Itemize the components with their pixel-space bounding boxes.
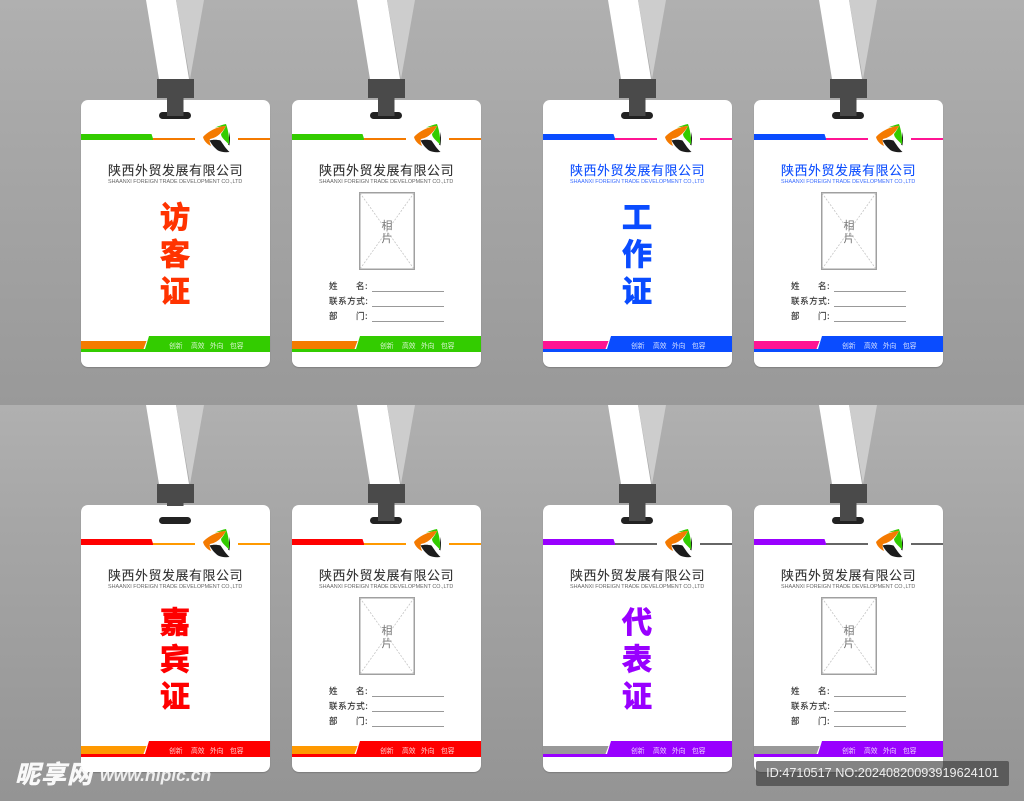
company name: 陕西外贸发展有限公司	[319, 160, 454, 179]
form fields	[791, 280, 906, 322]
pass type heading: 客	[160, 230, 190, 274]
form fields	[329, 280, 444, 322]
icon: company logo	[876, 124, 903, 152]
form fields: 姓	[791, 280, 800, 292]
lanyard and clip	[608, 0, 666, 119]
lanyard and clip	[543, 405, 732, 530]
form fields	[791, 684, 907, 730]
pass type heading: 代	[622, 598, 652, 642]
pass type heading: 嘉	[160, 598, 190, 642]
slogan: 高效	[653, 340, 667, 350]
pass type heading	[160, 193, 190, 311]
form fields: 联系方式:	[791, 700, 830, 712]
company name in English: SHAANXI FOREIGN TRADE DEVELOPMENT CO.,LTD	[570, 179, 704, 185]
form fields: 门:	[818, 310, 830, 322]
image ID box: ID:4710517 NO:20240820093919624101	[766, 766, 999, 780]
slogan: 高效	[402, 340, 416, 350]
slogan: 高效	[864, 340, 878, 350]
badge: delegate pass front (purple)	[543, 405, 732, 773]
lanyard and clip	[819, 0, 877, 119]
background: top row	[0, 0, 1024, 405]
top and bottom colour bands	[543, 505, 732, 772]
form fields: 姓	[329, 685, 338, 697]
slogan: 创新	[842, 340, 856, 350]
slogan: 包容	[441, 340, 455, 350]
slogan: 高效	[402, 745, 416, 755]
watermark: site name: 昵享网	[15, 755, 93, 791]
slogan: 外向	[672, 745, 686, 755]
slogan: 包容	[230, 340, 244, 350]
slogan: 包容	[903, 340, 917, 350]
slogan: 高效	[864, 745, 878, 755]
slogan	[380, 340, 455, 350]
company name in English: SHAANXI FOREIGN TRADE DEVELOPMENT CO.,LTD	[108, 179, 242, 185]
pass type heading: 证	[160, 267, 190, 311]
slogan: 创新	[631, 745, 645, 755]
badge: guest pass back (red)	[292, 405, 481, 773]
top and bottom colour bands	[81, 539, 270, 757]
badge: staff pass back (blue)	[754, 0, 943, 368]
photo placeholder: 相	[382, 217, 392, 233]
company name: 陕西外贸发展有限公司	[570, 160, 705, 179]
icon: company logo	[665, 124, 692, 152]
slogan: 外向	[210, 340, 224, 350]
slogan: 包容	[692, 340, 706, 350]
slogan: 外向	[210, 745, 224, 755]
slogan	[543, 745, 732, 755]
slogan: 外向	[883, 340, 897, 350]
slogan: 包容	[230, 745, 244, 755]
company name: 陕西外贸发展有限公司	[108, 160, 243, 179]
pass type heading	[607, 602, 667, 714]
card body	[81, 505, 270, 772]
lanyard and clip	[357, 0, 415, 119]
form fields: 门:	[818, 715, 830, 727]
form fields: 门:	[356, 310, 368, 322]
slogan: 包容	[441, 745, 455, 755]
card body	[292, 505, 481, 772]
photo placeholder: 片	[382, 635, 392, 651]
icon: company logo	[414, 124, 441, 152]
form fields: 姓	[329, 280, 338, 292]
image ID box	[756, 761, 1009, 786]
background: bottom row	[0, 405, 1024, 801]
company name in English: SHAANXI FOREIGN TRADE DEVELOPMENT CO.,LTD	[570, 584, 704, 590]
photo placeholder: 相	[382, 622, 392, 638]
icon: company logo	[414, 529, 441, 558]
slogan	[631, 340, 706, 350]
pass type heading: 宾	[160, 635, 190, 679]
company name in English: SHAANXI FOREIGN TRADE DEVELOPMENT CO.,LTD	[781, 584, 915, 590]
photo placeholder: 片	[844, 230, 854, 246]
icon: company logo	[665, 529, 692, 558]
badge: visitor pass back (green)	[292, 0, 481, 368]
pass type heading: 证	[160, 672, 190, 716]
pass type heading: 证	[622, 672, 652, 716]
slogan: 高效	[191, 340, 205, 350]
slogan: 包容	[903, 745, 917, 755]
slogan: 外向	[883, 745, 897, 755]
lanyard and clip	[146, 405, 204, 524]
form fields: 部	[791, 715, 800, 727]
top and bottom colour bands	[754, 505, 943, 772]
form fields: 门:	[356, 715, 368, 727]
photo placeholder	[359, 597, 415, 675]
slogan: 包容	[692, 745, 706, 755]
card body	[754, 100, 943, 367]
top and bottom colour bands	[292, 134, 481, 352]
badge: staff pass front (blue)	[543, 0, 732, 368]
slogan: 外向	[421, 340, 435, 350]
card body	[754, 505, 943, 772]
company name in English: SHAANXI FOREIGN TRADE DEVELOPMENT CO.,LTD	[319, 584, 453, 590]
photo placeholder: 片	[382, 230, 392, 246]
slogan: 创新	[842, 745, 856, 755]
card body	[81, 100, 270, 367]
company name: 陕西外贸发展有限公司	[319, 565, 454, 584]
form fields: 部	[329, 715, 338, 727]
icon: company logo	[203, 124, 230, 152]
slogan: 高效	[653, 745, 667, 755]
company name in English: SHAANXI FOREIGN TRADE DEVELOPMENT CO.,LTD	[319, 179, 453, 185]
slogan: 创新	[631, 340, 645, 350]
lanyard and clip	[357, 405, 415, 524]
lanyard and clip	[146, 0, 204, 119]
slogan	[842, 340, 917, 350]
top and bottom colour bands	[292, 539, 481, 757]
pass type heading: 表	[622, 635, 652, 679]
top and bottom colour bands	[754, 134, 943, 352]
company name: 陕西外贸发展有限公司	[781, 160, 916, 179]
icon: company logo	[876, 529, 903, 558]
company name: 陕西外贸发展有限公司	[570, 565, 705, 584]
slogan: 创新	[169, 745, 183, 755]
photo placeholder	[359, 192, 415, 270]
company name in English: SHAANXI FOREIGN TRADE DEVELOPMENT CO.,LTD	[108, 584, 242, 590]
top and bottom colour bands	[81, 134, 270, 352]
card body	[543, 505, 732, 772]
badge: visitor pass front (green)	[81, 0, 270, 368]
slogan	[169, 340, 244, 350]
form fields: 名:	[818, 685, 830, 697]
slogan: 外向	[421, 745, 435, 755]
slogan	[754, 745, 943, 755]
photo placeholder: 相	[844, 622, 854, 638]
slogan: 高效	[191, 745, 205, 755]
form fields: 联系方式:	[329, 700, 368, 712]
company name in English: SHAANXI FOREIGN TRADE DEVELOPMENT CO.,LTD	[781, 179, 915, 185]
company name: 陕西外贸发展有限公司	[781, 565, 916, 584]
lanyard and clip	[754, 405, 943, 530]
card body	[543, 100, 732, 367]
pass type heading	[622, 193, 652, 311]
badge: guest pass front (red)	[81, 405, 270, 773]
form fields: 部	[329, 310, 338, 322]
slogan: 创新	[380, 745, 394, 755]
badge: delegate pass back (purple)	[754, 405, 943, 772]
pass type heading: 访	[160, 193, 190, 237]
photo placeholder	[821, 597, 877, 675]
form fields: 联系方式:	[791, 295, 830, 307]
card body	[292, 100, 481, 367]
form fields: 名:	[356, 280, 368, 292]
slogan: 外向	[672, 340, 686, 350]
top and bottom colour bands	[543, 134, 732, 352]
slogan: 创新	[380, 340, 394, 350]
pass type heading: 作	[622, 230, 652, 274]
icon: company logo	[203, 529, 230, 558]
form fields: 名:	[356, 685, 368, 697]
form fields: 姓	[791, 685, 800, 697]
form fields: 联系方式:	[329, 295, 368, 307]
slogan	[169, 745, 244, 755]
form fields	[329, 685, 444, 727]
form fields: 部	[791, 310, 800, 322]
slogan	[380, 745, 455, 755]
photo placeholder	[821, 192, 877, 270]
company name: 陕西外贸发展有限公司	[108, 565, 243, 584]
form fields: 名:	[818, 280, 830, 292]
pass type heading: 工	[622, 193, 652, 237]
slogan: 创新	[169, 340, 183, 350]
pass type heading	[160, 598, 190, 716]
pass type heading: 证	[622, 267, 652, 311]
photo placeholder: 相	[844, 217, 854, 233]
watermark: site URL: www.nipic.cn	[100, 765, 211, 785]
photo placeholder: 片	[844, 635, 854, 651]
